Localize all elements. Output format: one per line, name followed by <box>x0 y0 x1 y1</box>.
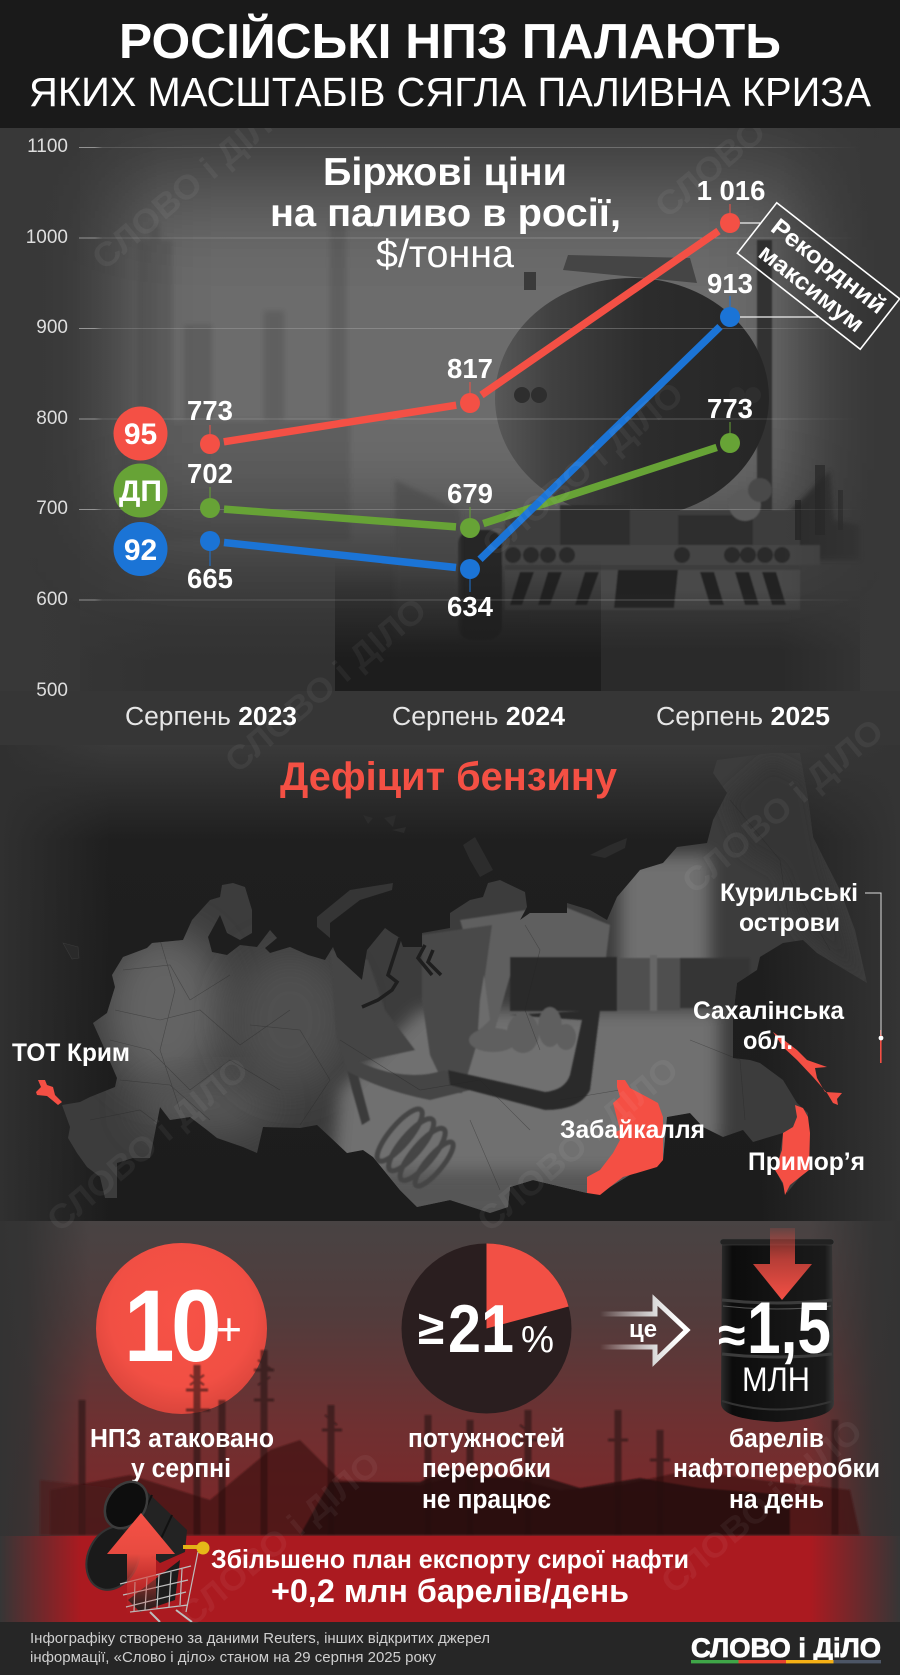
caption: barrels per day: барелів <box>729 1425 824 1453</box>
series: petrol 95: 817 <box>447 353 493 384</box>
region labels: Курильські <box>720 879 858 907</box>
caption: capacity offline <box>408 1425 565 1514</box>
caption: capacity offline: потужностей <box>408 1425 565 1453</box>
stat: 10+ number: 10 <box>124 1269 218 1383</box>
stat: 1.5 million number: 1,5 <box>747 1288 831 1369</box>
text: СЛОВО і ДІЛО <box>654 1412 870 1601</box>
region labels: Забайкалля <box>560 1116 705 1144</box>
stat: 21 percent number: ≥ <box>418 1302 444 1355</box>
chart heading: на паливо в росії, <box>270 192 621 235</box>
caption: capacity offline: переробки <box>422 1455 551 1483</box>
series: diesel: 773 <box>707 393 753 424</box>
chart photo backdrop: refinery and fuel tanker <box>0 128 900 691</box>
y axis gridlines and labels: 1100 <box>27 136 68 157</box>
pie chart: 21 percent <box>402 1244 572 1414</box>
text: СЛОВО і ДІЛО <box>40 1050 256 1239</box>
subtitle: ЯКИХ МАСШТАБІВ СЯГЛА ПАЛИВНА КРИЗА <box>29 69 871 115</box>
series: petrol 95 <box>187 175 765 454</box>
series: petrol 92: 665 <box>187 563 233 594</box>
text: СЛОВО і ДІЛО <box>470 1050 686 1239</box>
section background <box>0 1221 900 1536</box>
stat: 21 percent number: % <box>521 1319 554 1361</box>
series: petrol 92: 913 <box>707 268 753 299</box>
source note: Інфографіку створено за даними Reuters, інших відкритих джерел <box>30 1630 490 1647</box>
refinery silhouette <box>40 1350 860 1535</box>
highlighted regions <box>36 1030 882 1195</box>
panel: price chart <box>0 128 900 731</box>
panel: gasoline deficit map <box>0 745 900 1221</box>
series: petrol 92 <box>187 268 753 622</box>
text: СЛОВО і ДІЛО <box>218 591 434 780</box>
arrow: production down <box>753 1228 812 1300</box>
caption: capacity offline: не працює <box>422 1486 551 1514</box>
region labels <box>12 879 865 1176</box>
leader line: Kuril islands <box>865 893 883 1040</box>
stat: 1.5 million number: ≈ <box>718 1307 745 1363</box>
legend badges <box>114 406 168 576</box>
text: СЛОВО і ДІЛО <box>475 375 691 564</box>
arrow: this equals <box>600 1300 687 1361</box>
region labels: Сахалінська <box>693 997 845 1025</box>
icon: cart with barrels <box>76 1474 210 1622</box>
region: Crimea <box>36 1080 62 1105</box>
stat: 1.5 million number <box>718 1288 831 1399</box>
chart heading: $/тонна <box>376 233 514 276</box>
banner background <box>0 1536 900 1622</box>
stat circle: 10+ refineries <box>96 1243 267 1414</box>
heading: Дефіцит бензину <box>280 755 618 799</box>
region labels: Примор’я <box>748 1148 865 1176</box>
series: diesel <box>187 393 753 538</box>
y axis gridlines and labels <box>26 136 860 701</box>
caption: barrels per day: нафтопереробки <box>673 1455 880 1483</box>
x axis labels <box>125 703 830 731</box>
chart heading <box>270 151 621 276</box>
callout: record high: Рекордний <box>766 213 891 320</box>
series: petrol 95: 773 <box>187 395 233 426</box>
callout: record high: максимум <box>753 239 869 338</box>
stat: 10+ number: + <box>216 1303 242 1355</box>
title block <box>0 0 900 128</box>
y axis gridlines and labels: 1000 <box>26 227 68 248</box>
banner text: +0,2 млн барелів/день <box>271 1573 629 1609</box>
source note: інформації, «Слово і діло» станом на 29 серпня 2025 року <box>30 1649 436 1666</box>
y axis gridlines and labels: 500 <box>36 680 68 701</box>
source note <box>30 1630 490 1666</box>
text: СЛОВО і ДІЛО <box>85 88 301 277</box>
text: СЛОВО і ДІЛО <box>172 1445 388 1634</box>
panel: footer <box>0 1622 900 1675</box>
y axis gridlines and labels: 700 <box>36 498 68 519</box>
caption: refineries attacked: у серпні <box>131 1455 231 1483</box>
y axis gridlines and labels: 900 <box>36 317 68 338</box>
callout: record high <box>737 203 900 349</box>
panel: refinery statistics <box>0 1221 900 1536</box>
title: РОСІЙСЬКІ НПЗ ПАЛАЮТЬ <box>119 14 781 69</box>
y axis gridlines and labels: 600 <box>36 589 68 610</box>
chart heading: Біржові ціни <box>323 151 567 194</box>
region labels: ТОТ Крим <box>12 1039 130 1067</box>
banner text <box>211 1544 689 1609</box>
region: Zabaikalia <box>587 1080 663 1195</box>
series: diesel: 679 <box>447 478 493 509</box>
region: Kuril islands <box>880 1030 882 1063</box>
stat: 21 percent number <box>418 1291 554 1367</box>
region labels: обл. <box>743 1027 793 1055</box>
legend badges: 95 <box>124 418 157 451</box>
icon: oil barrel <box>720 1239 834 1422</box>
text: СЛОВО і ДІЛО <box>675 712 891 901</box>
caption: refineries attacked <box>90 1425 274 1483</box>
region: Primorye <box>775 1105 810 1195</box>
legend badges: ДП <box>119 475 162 508</box>
caption: barrels per day: на день <box>729 1486 824 1514</box>
x axis labels: Серпень 2023 <box>125 703 297 731</box>
caption: refineries attacked: НПЗ атаковано <box>90 1425 274 1453</box>
stat: 21 percent number: 21 <box>448 1291 514 1367</box>
panel: export banner <box>0 1474 900 1622</box>
x axis labels: Серпень 2025 <box>656 703 830 731</box>
caption: barrels per day <box>673 1425 880 1514</box>
series: diesel: 702 <box>187 458 233 489</box>
stat: 1.5 million number: МЛН <box>742 1361 810 1399</box>
legend badges: 92 <box>124 534 157 567</box>
map section background <box>0 745 900 1221</box>
banner text: Збільшено план експорту сирої нафти <box>211 1544 689 1574</box>
y axis gridlines and labels: 800 <box>36 408 68 429</box>
region: Sakhalin <box>773 1032 842 1105</box>
map of russia with fuel nozzle photo <box>50 750 880 1220</box>
logo: СЛОВО і ДіЛО <box>691 1633 881 1663</box>
series: petrol 92: 634 <box>447 591 494 622</box>
series: petrol 95: 1 016 <box>697 175 765 206</box>
arrow: this equals: це <box>629 1316 657 1343</box>
text: СЛОВО і ДІЛО <box>648 36 864 225</box>
region labels: острови <box>739 909 840 937</box>
x axis labels: Серпень 2024 <box>392 703 566 731</box>
